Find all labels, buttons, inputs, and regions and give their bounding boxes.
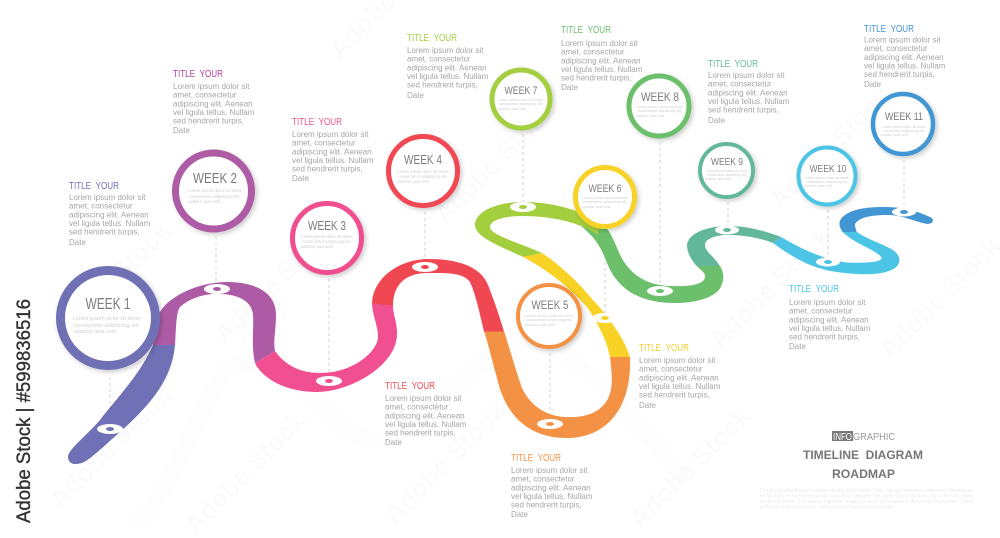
- text block: week 9: sed hendrerit turpis,: [708, 106, 779, 115]
- circle: week 5: [518, 285, 580, 347]
- text block: week 8: adipiscing elit. Aenean: [561, 56, 641, 65]
- text block: week 5: sed hendrerit turpis,: [511, 501, 582, 510]
- marker week 1: [97, 424, 123, 434]
- text block: week 5: Date: [511, 510, 528, 519]
- text block: week 6: [639, 342, 721, 410]
- text block: week 3: [292, 116, 374, 183]
- circle: week 8: consectetur adipiscing elit,: [638, 109, 682, 113]
- text block: week 9: Date: [708, 116, 725, 125]
- circle: week 7: Lorem ipsum dolor sit amet,: [498, 98, 544, 102]
- circle: week 9: WEEK 9: [711, 156, 743, 168]
- circle: week 10: [798, 148, 856, 204]
- text block: week 5: TITLE YOUR: [511, 452, 561, 464]
- circle: week 2: [176, 153, 252, 229]
- road segment: week 4: [372, 259, 504, 332]
- text block: week 4: vel ligula tellus. Nullam: [385, 420, 467, 429]
- circle: week 11: [873, 94, 933, 154]
- text block: week 5: vel ligula tellus. Nullam: [511, 492, 593, 501]
- circle: week 8: [629, 76, 689, 136]
- text block: week 1: TITLE YOUR: [69, 180, 119, 192]
- text block: week 8: Date: [561, 83, 578, 92]
- circle: week 9: Lorem ipsum dolor sit amet,: [706, 169, 748, 173]
- text block: week 10: Lorem ipsum dolor sit: [789, 298, 866, 307]
- circle: week 5: consectetur adipiscing elit,: [526, 317, 572, 322]
- text block: week 1: Lorem ipsum dolor sit: [69, 193, 146, 202]
- text block: week 9: vel ligula tellus. Nullam: [708, 97, 790, 106]
- circle: week 6: consectetur adipiscing elit,: [583, 200, 627, 204]
- footer description: pellentesque lorem erat, quis dictum massa rhoncus non.: [760, 504, 895, 510]
- text block: week 8: [561, 24, 643, 92]
- road segment: week 11: [839, 207, 933, 232]
- marker week 7: [510, 202, 536, 212]
- text block: week 7: [407, 32, 489, 100]
- text block: week 2: sed hendrerit turpis,: [173, 117, 244, 126]
- text block: week 2: [173, 68, 255, 135]
- circle: week 2: Lorem ipsum dolor sit amet,: [188, 188, 242, 193]
- marker week 3: [316, 376, 342, 386]
- text block: week 4: TITLE YOUR: [385, 380, 435, 392]
- circle: week 6: [576, 168, 634, 226]
- watermark pattern: Adobe Stock: [208, 215, 342, 349]
- text block: week 5: adipiscing elit. Aenean: [511, 483, 591, 492]
- infographic badge: INFO: [833, 432, 852, 443]
- footer description: [760, 488, 973, 510]
- footer description: eleifend tortor. Curabitur egestas augue purus, et posuere dui porta imperdiet. Nam: [760, 499, 973, 505]
- text block: week 1: amet, consectetur: [69, 202, 133, 211]
- text block: week 1: Date: [69, 238, 86, 247]
- text block: week 8: vel ligula tellus. Nullam: [561, 65, 643, 74]
- circle: week 10: urabitur quis velit: [804, 184, 832, 188]
- circle: week 7: [492, 70, 550, 128]
- road segment: week 8: [580, 212, 723, 303]
- text block: week 10: amet, consectetur: [789, 307, 853, 316]
- circle: week 7: WEEK 7: [504, 85, 538, 97]
- title: timeline diagram roadmap: ROADMAP: [832, 467, 895, 481]
- circle: week 2: urabitur quis velit: [187, 199, 221, 204]
- text block: week 8: Lorem ipsum dolor sit: [561, 39, 638, 48]
- text block: week 9: TITLE YOUR: [708, 58, 758, 70]
- text block: week 8: TITLE YOUR: [561, 24, 611, 36]
- circle: week 9: [700, 144, 753, 197]
- circle: week 5: WEEK 5: [532, 298, 569, 312]
- road segment: week 6: [523, 253, 630, 358]
- text block: week 6: vel ligula tellus. Nullam: [639, 382, 721, 391]
- road segment: week 9: [687, 226, 781, 266]
- text block: week 11: Date: [864, 80, 881, 89]
- text block: week 4: sed hendrerit turpis,: [385, 429, 456, 438]
- text block: week 6: Date: [639, 401, 656, 410]
- circle: week 4: consectetur adipiscing elit,: [398, 174, 448, 179]
- text block: week 8: sed hendrerit turpis,: [561, 74, 632, 83]
- circle: week 11: Lorem ipsum dolor sit amet,: [882, 125, 926, 129]
- road segment: week 7: [475, 202, 600, 257]
- text block: week 11: amet, consectetur: [864, 44, 928, 53]
- footer description: Donec sagittis libero tristique iaculis sollicitudin. Duis congue egestas maximus. Maecenas: [760, 488, 973, 494]
- marker week 10: [816, 258, 840, 266]
- text block: week 2: Date: [173, 126, 190, 135]
- watermark pattern: Adobe Stock: [178, 405, 312, 538]
- text block: week 4: amet, consectetur: [385, 403, 449, 412]
- text block: week 1: sed hendrerit turpis,: [69, 228, 140, 237]
- circle: week 1: Lorem ipsum dolor sit amet,: [72, 316, 142, 322]
- text block: week 6: adipiscing elit. Aenean: [639, 373, 719, 382]
- circle: week 3: consectetur adipiscing elit,: [302, 239, 352, 244]
- circle: week 8: urabitur quis velit: [636, 114, 665, 118]
- circle: week 4: WEEK 4: [404, 153, 442, 167]
- text block: week 11: sed hendrerit turpis,: [864, 70, 935, 79]
- road segment: week 2: [153, 282, 276, 363]
- circle: week 3: WEEK 3: [308, 219, 346, 233]
- text block: week 4: [385, 380, 467, 447]
- text block: week 7: vel ligula tellus. Nullam: [407, 72, 489, 81]
- marker week 2: [204, 284, 230, 294]
- text block: week 11: adipiscing elit. Aenean: [864, 53, 944, 62]
- text block: week 9: amet, consectetur: [708, 80, 772, 89]
- text block: week 7: adipiscing elit. Aenean: [407, 63, 487, 72]
- infographic badge: GRAPHIC: [853, 432, 895, 443]
- circle: week 5: urabitur quis velit: [525, 322, 556, 327]
- text block: week 10: vel ligula tellus. Nullam: [789, 324, 871, 333]
- text block: week 1: adipiscing elit. Aenean: [69, 210, 149, 219]
- circle: week 10: consectetur adipiscing elit,: [806, 180, 848, 184]
- road segment: week 1: [68, 345, 175, 464]
- watermark pattern: Adobe Stock: [763, 80, 897, 214]
- text block: week 7: sed hendrerit turpis,: [407, 81, 478, 90]
- text block: week 10: Date: [789, 342, 806, 351]
- text block: week 10: sed hendrerit turpis,: [789, 333, 860, 342]
- marker week 9: [715, 226, 739, 234]
- text block: week 9: Lorem ipsum dolor sit: [708, 71, 785, 80]
- text block: week 6: TITLE YOUR: [639, 342, 689, 354]
- text block: week 2: adipiscing elit. Aenean: [173, 99, 253, 108]
- watermark pattern: Adobe Stock: [43, 215, 177, 349]
- circle: week 2: consectetur adipiscing elit,: [189, 194, 241, 199]
- text block: week 4: adipiscing elit. Aenean: [385, 411, 465, 420]
- watermark pattern: Adobe Stock: [43, 380, 177, 514]
- text block: week 1: vel ligula tellus. Nullam: [69, 219, 151, 228]
- marker week 4: [412, 262, 438, 272]
- text block: week 2: amet, consectetur: [173, 91, 237, 100]
- text block: week 6: sed hendrerit turpis,: [639, 391, 710, 400]
- text block: week 2: Lorem ipsum dolor sit: [173, 82, 250, 91]
- text block: week 9: adipiscing elit. Aenean: [708, 88, 788, 97]
- road segment: week 3: [255, 304, 397, 392]
- text block: week 11: [864, 23, 946, 89]
- circle: week 4: Lorem ipsum dolor sit amet,: [397, 169, 449, 174]
- circle: week 6: Lorem ipsum dolor sit amet,: [582, 196, 628, 200]
- text block: week 2: vel ligula tellus. Nullam: [173, 108, 255, 117]
- circle: week 1: urabitur quis velit: [74, 329, 117, 335]
- text block: week 10: adipiscing elit. Aenean: [789, 315, 869, 324]
- text block: week 6: Lorem ipsum dolor sit: [639, 356, 716, 365]
- text block: week 5: [511, 452, 593, 519]
- circle: week 2: WEEK 2: [193, 170, 237, 187]
- text block: week 3: vel ligula tellus. Nullam: [292, 156, 374, 165]
- circle: week 9: consectetur adipiscing elit,: [707, 173, 747, 177]
- title: timeline diagram roadmap: [803, 448, 923, 481]
- text block: week 7: amet, consectetur: [407, 55, 471, 64]
- circle: week 3: Lorem ipsum dolor sit amet,: [301, 234, 353, 239]
- road markers: [97, 202, 916, 434]
- text block: week 2: TITLE YOUR: [173, 68, 223, 80]
- text block: week 3: amet, consectetur: [292, 139, 356, 148]
- circle: week 7: consectetur adipiscing elit,: [499, 102, 543, 106]
- circle: week 11: urabitur quis velit: [880, 133, 908, 137]
- text block: week 10: TITLE YOUR: [789, 283, 839, 295]
- text block: week 7: Date: [407, 91, 424, 100]
- circle: week 3: urabitur quis velit: [301, 244, 334, 249]
- text block: week 4: Date: [385, 438, 402, 447]
- text block: week 1: [69, 180, 151, 247]
- circle: week 1: consectetur adipiscing elit,: [74, 323, 140, 329]
- marker week 5: [537, 419, 563, 429]
- text block: week 11: TITLE YOUR: [864, 23, 914, 35]
- marker week 11: [892, 208, 916, 216]
- text block: week 7: Lorem ipsum dolor sit: [407, 46, 484, 55]
- circle: week 1: [60, 270, 156, 366]
- circle: week 3: [292, 204, 362, 272]
- watermark pattern: Adobe Stock: [428, 95, 562, 229]
- marker week 8: [647, 286, 673, 296]
- road segment: week 10: [773, 232, 899, 274]
- text block: week 3: Lorem ipsum dolor sit: [292, 130, 369, 139]
- infographic badge: [832, 431, 895, 443]
- circle: week 11: consectetur adipiscing elit,: [883, 129, 925, 133]
- road segment: week 5: [484, 331, 630, 438]
- circle: week 11: WEEK 11: [885, 111, 923, 123]
- circle: week 8: Lorem ipsum dolor sit amet,: [637, 105, 683, 109]
- stock id vertical label: Adobe Stock | #599836516: [14, 299, 35, 523]
- text block: week 8: amet, consectetur: [561, 48, 625, 57]
- text block: week 6: amet, consectetur: [639, 365, 703, 374]
- watermark pattern: Adobe Stock: [378, 395, 512, 529]
- circle: week 10: Lorem ipsum dolor sit amet,: [805, 176, 849, 180]
- circle: week 7: urabitur quis velit: [498, 107, 527, 111]
- footer description: id sit mauris ut elit euismod faucibus semper vel nibh. Nulla dictum, risus lectus, eget: [760, 494, 973, 500]
- text block: week 3: sed hendrerit turpis,: [292, 165, 363, 174]
- title: timeline diagram roadmap: TIMELINE DIAGRAM: [803, 448, 923, 462]
- watermark pattern: Adobe Stock: [703, 220, 837, 354]
- text block: week 11: vel ligula tellus. Nullam: [864, 62, 946, 70]
- text block: week 3: adipiscing elit. Aenean: [292, 147, 372, 156]
- watermark pattern: Adobe Stock: [623, 400, 757, 534]
- text block: week 9: [708, 58, 790, 125]
- circle: week 4: [388, 136, 458, 206]
- circle: week 6: urabitur quis velit: [582, 205, 611, 209]
- text block: week 5: Lorem ipsum dolor sit: [511, 466, 588, 475]
- circle: week 8: WEEK 8: [641, 90, 679, 104]
- circle: week 10: WEEK 10: [810, 163, 847, 175]
- text block: week 3: TITLE YOUR: [292, 116, 342, 128]
- text block: week 7: TITLE YOUR: [407, 32, 457, 44]
- roadmap road: [68, 202, 933, 464]
- circle: week 9: urabitur quis velit: [705, 177, 731, 181]
- text block: week 11: Lorem ipsum dolor sit: [864, 36, 941, 44]
- circle: week 1: WEEK 1: [86, 296, 131, 313]
- text block: week 3: Date: [292, 174, 309, 183]
- circle: week 5: Lorem ipsum dolor sit amet,: [524, 313, 574, 318]
- dashed connector lines: [110, 134, 904, 429]
- text block: week 10: [789, 283, 871, 351]
- marker week 6: [592, 313, 618, 323]
- circle: week 6: WEEK 6: [588, 183, 622, 195]
- text block: week 4: Lorem ipsum dolor sit: [385, 394, 462, 403]
- circle: week 4: urabitur quis velit: [397, 179, 430, 184]
- text block: week 5: amet, consectetur: [511, 475, 575, 484]
